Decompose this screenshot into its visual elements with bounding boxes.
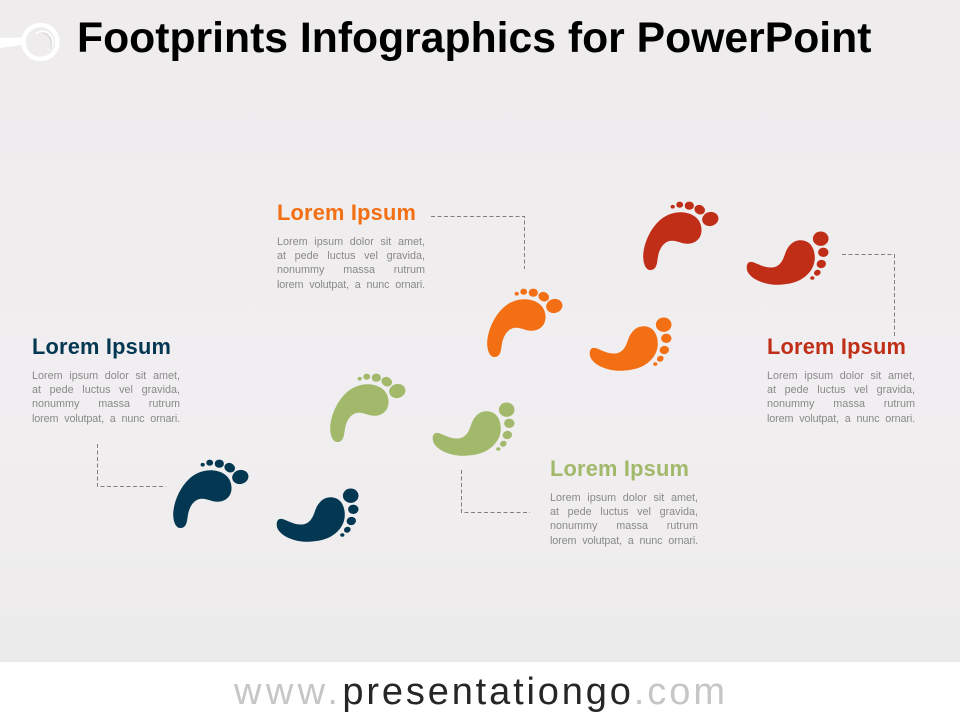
text block: navy: Lorem Ipsum <box>32 334 171 359</box>
text block: green: nonummy massa rutrum <box>550 520 698 532</box>
title: Footprints Infographics for PowerPoint <box>77 14 871 62</box>
text block: orange: Lorem ipsum dolor sit amet, <box>277 236 425 248</box>
footprints: green step <box>330 374 514 456</box>
text block: red: lorem volutpat, a nunc ornari. <box>767 413 915 425</box>
connector: green <box>462 470 530 512</box>
text block: red <box>767 334 915 425</box>
text block: red: Lorem Ipsum <box>767 334 906 359</box>
text block: green: at pede luctus vel gravida, <box>550 506 698 518</box>
text block: orange: Lorem Ipsum <box>277 200 416 225</box>
footprints: red step <box>643 202 828 285</box>
text block: navy: at pede luctus vel gravida, <box>32 384 180 396</box>
text block: orange <box>277 200 425 291</box>
text block: navy <box>32 334 180 425</box>
text block: red: nonummy massa rutrum <box>767 398 915 410</box>
text block: green <box>550 456 698 547</box>
footer url: www.presentationgo.com <box>234 671 728 713</box>
text block: navy: Lorem ipsum dolor sit amet, <box>32 370 180 382</box>
text block: orange: lorem volutpat, a nunc ornari. <box>277 279 425 291</box>
text block: green: Lorem ipsum dolor sit amet, <box>550 492 698 504</box>
text block: orange: at pede luctus vel gravida, <box>277 250 425 262</box>
text block: navy: lorem volutpat, a nunc ornari. <box>32 413 180 425</box>
text block: orange: nonummy massa rutrum <box>277 264 425 276</box>
connector: orange <box>431 216 524 269</box>
text block: green: lorem volutpat, a nunc ornari. <box>550 535 698 547</box>
footprints: orange step <box>487 289 672 371</box>
text block: red: Lorem ipsum dolor sit amet, <box>767 370 915 382</box>
icon: pin ring <box>0 22 60 62</box>
connector: red <box>842 254 894 336</box>
footprints: navy step <box>173 460 359 542</box>
text block: navy: nonummy massa rutrum <box>32 398 180 410</box>
text block: red: at pede luctus vel gravida, <box>767 384 915 396</box>
connector: navy <box>98 444 166 486</box>
text block: green: Lorem Ipsum <box>550 456 689 481</box>
